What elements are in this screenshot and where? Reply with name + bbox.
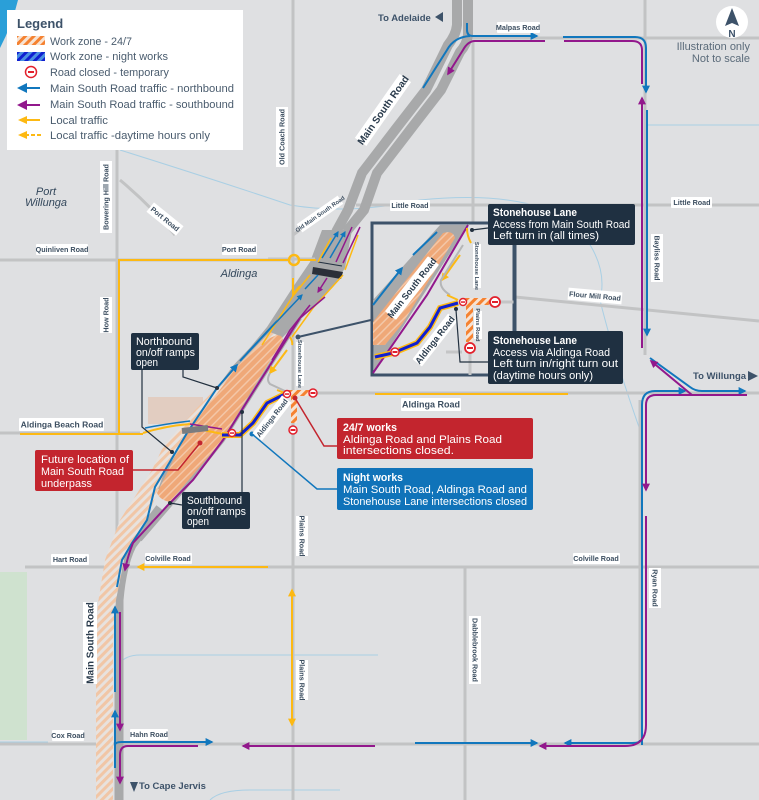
road labels: Dabblebrook Road (470, 618, 480, 682)
callout: Stonehouse Lane left turn in (488, 204, 635, 245)
callout: night works (337, 468, 533, 510)
road labels: Colville Road (145, 554, 191, 563)
main south road (119, 0, 468, 800)
legend: Local traffic (50, 115, 109, 127)
inset road labels: Main South Road (385, 256, 439, 320)
southbound traffic (120, 41, 747, 783)
road labels: Quinliven Road (36, 245, 88, 254)
legend: Local traffic -daytime hours only (50, 130, 211, 142)
callout: future underpass: underpass (41, 478, 92, 490)
road labels: Hahn Road (130, 730, 168, 739)
legend: Work zone - 24/7 (50, 36, 132, 48)
callout: Stonehouse Lane left turn in: Left turn in (all times) (493, 230, 599, 242)
callout: southbound ramps: on/off ramps (187, 506, 246, 518)
northbound traffic (115, 23, 745, 768)
road labels: Malpas Road (496, 23, 540, 32)
callout: future underpass: Future location of (41, 454, 130, 466)
callout: 24/7 works (337, 418, 533, 459)
road labels: Port Road (222, 245, 256, 254)
inset road labels: Aldinga Road (413, 314, 457, 366)
brown development area (148, 397, 203, 424)
bridge area road surface (240, 230, 352, 365)
road labels: Aldinga Beach Road (21, 420, 103, 430)
road labels: Flour Mill Road (569, 289, 621, 303)
inset panel (372, 223, 514, 375)
callout: Stonehouse Lane via Aldinga Road: Access via Aldinga Road (493, 347, 610, 359)
road labels: Little Road (391, 201, 429, 210)
north arrow (716, 6, 748, 40)
road labels: Aldinga Road (254, 397, 290, 439)
inset road labels: Plains Road (474, 308, 480, 342)
callout: night works: Stonehouse Lane intersections closed (343, 496, 527, 508)
road labels: Bayliss Road (652, 235, 662, 281)
legend (7, 10, 243, 150)
road labels: Ryan Road (650, 569, 660, 607)
callout: Stonehouse Lane left turn in: Stonehouse Lane (493, 207, 577, 219)
road labels: Main South Road (356, 74, 412, 147)
callout: Stonehouse Lane via Aldinga Road (488, 331, 623, 384)
inset road labels: Stonehouse Lane (473, 242, 479, 291)
place names: Port (36, 186, 57, 198)
callout: Stonehouse Lane via Aldinga Road: Stonehouse Lane (493, 335, 577, 347)
road labels: Old Main South Road (295, 195, 347, 234)
destination labels: To Cape Jervis (139, 781, 206, 792)
callout: northbound ramps (131, 333, 199, 370)
inset road labels (384, 242, 482, 367)
road labels: Bowering Hill Road (102, 164, 110, 230)
road labels: Port Road (149, 205, 181, 233)
legend: Main South Road traffic - southbound (50, 99, 234, 111)
callout: night works: Night works (343, 472, 403, 484)
callout: northbound ramps: on/off ramps (136, 347, 195, 359)
scale note: Illustration only (677, 41, 750, 53)
inset closure icons (391, 297, 500, 356)
callout: northbound ramps: open (136, 357, 158, 369)
road labels: Little Road (673, 198, 711, 207)
road labels: How Road (102, 297, 110, 333)
green open space (0, 572, 27, 740)
road labels: Main South Road (86, 602, 96, 684)
callout: 24/7 works: intersections closed. (343, 445, 454, 457)
callout: Stonehouse Lane via Aldinga Road: (daytime hours only) (493, 370, 593, 382)
bridge interchange (247, 227, 360, 360)
legend: Road closed - temporary (50, 67, 169, 79)
scale note (677, 41, 750, 65)
callout: night works: Main South Road, Aldinga Road and (343, 484, 527, 496)
destination labels: To Adelaide (378, 13, 431, 24)
road closed icons on main map (228, 389, 317, 436)
callout: 24/7 works: 24/7 works (343, 422, 397, 434)
callout: future underpass: Main South Road (41, 466, 124, 478)
legend: Main South Road traffic - northbound (50, 83, 234, 95)
road labels: Colville Road (573, 554, 619, 563)
leader lines (142, 370, 242, 505)
road labels: Aldinga Road (402, 400, 460, 410)
road labels: Cox Road (51, 731, 85, 740)
road labels: Stonehouse Lane (296, 340, 302, 389)
legend: Work zone - night works (50, 51, 168, 63)
callout: Stonehouse Lane via Aldinga Road: Left turn in/right turn out (493, 358, 618, 370)
road labels: Old Coach Road (278, 109, 286, 165)
callout: southbound ramps: Southbound (187, 495, 242, 507)
interchange at Aldinga Beach Road (143, 393, 287, 435)
callout: southbound ramps: open (187, 516, 209, 528)
light work zone hatch band (96, 332, 280, 800)
destination labels: To Willunga (693, 371, 747, 382)
callout: northbound ramps: Northbound (136, 336, 192, 348)
scale note: Not to scale (692, 53, 750, 65)
road labels: Plains Road (298, 659, 306, 701)
work zone 24/7 area (157, 335, 283, 502)
place names: Willunga (25, 197, 67, 209)
place names: Aldinga (220, 268, 257, 280)
callout: southbound ramps (182, 492, 250, 529)
north arrow: N (728, 29, 736, 40)
callout: 24/7 works: Aldinga Road and Plains Road (343, 434, 502, 446)
legend: Legend (17, 16, 63, 31)
callout: Stonehouse Lane left turn in: Access from Main South Road (493, 219, 630, 231)
water body (0, 0, 18, 48)
local traffic (20, 255, 568, 725)
road labels: Plains Road (298, 515, 306, 557)
work zone hatch on Aldinga and Plains roads (288, 390, 310, 423)
place names (25, 186, 257, 280)
callout: future underpass (35, 450, 133, 491)
road labels: Hart Road (53, 555, 87, 564)
